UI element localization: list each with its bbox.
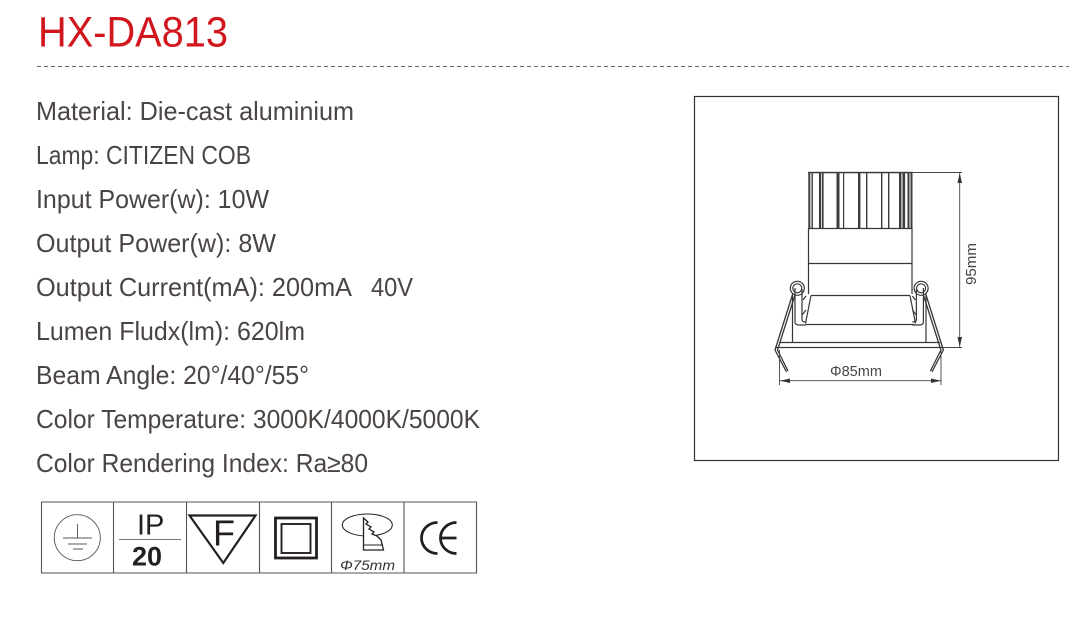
icon: IP 20 rating: 20	[132, 542, 162, 572]
specification list: Lumen Fludx(lm): 620lm	[36, 316, 305, 346]
right spring clip	[912, 281, 943, 372]
icon: IP 20 rating: IP	[137, 509, 164, 541]
specification list: 40V	[371, 272, 414, 302]
specification list: Output Current(mA): 200mA	[36, 272, 353, 302]
icon: CE mark	[422, 522, 456, 554]
specification list: Color Rendering Index: Ra≥80	[36, 448, 368, 478]
icon: F triangle mark	[190, 513, 256, 563]
specification list	[36, 96, 481, 478]
height dimension 95mm: 95mm	[963, 243, 980, 285]
icon: protective earth	[54, 515, 100, 561]
lamp body outline	[775, 228, 943, 348]
lamp heat sink fins	[808, 172, 912, 228]
specification list: Beam Angle: 20°/40°/55°	[36, 360, 309, 390]
specification list: Input Power(w): 10W	[36, 184, 269, 214]
specification list: Output Power(w): 8W	[36, 228, 276, 258]
specification list: Material: Die-cast aluminium	[36, 96, 354, 126]
title: HX-DA813	[38, 9, 228, 57]
width dimension 85mm	[780, 350, 941, 385]
icon: cutout hole 75mm	[340, 514, 395, 573]
icon: F triangle mark: F	[213, 513, 235, 554]
height dimension 95mm	[912, 172, 980, 348]
icon: IP 20 rating	[119, 509, 181, 572]
left spring clip	[775, 281, 806, 372]
width dimension 85mm: Φ85mm	[830, 364, 882, 380]
specification list: Lamp: CITIZEN COB	[36, 140, 251, 170]
certification icon table	[42, 502, 476, 573]
specification list: Color Temperature: 3000K/4000K/5000K	[36, 404, 481, 434]
panel: product dimension drawing	[694, 96, 1058, 460]
icon: double insulation square	[276, 518, 316, 558]
icon: cutout hole 75mm: Φ75mm	[340, 557, 395, 573]
